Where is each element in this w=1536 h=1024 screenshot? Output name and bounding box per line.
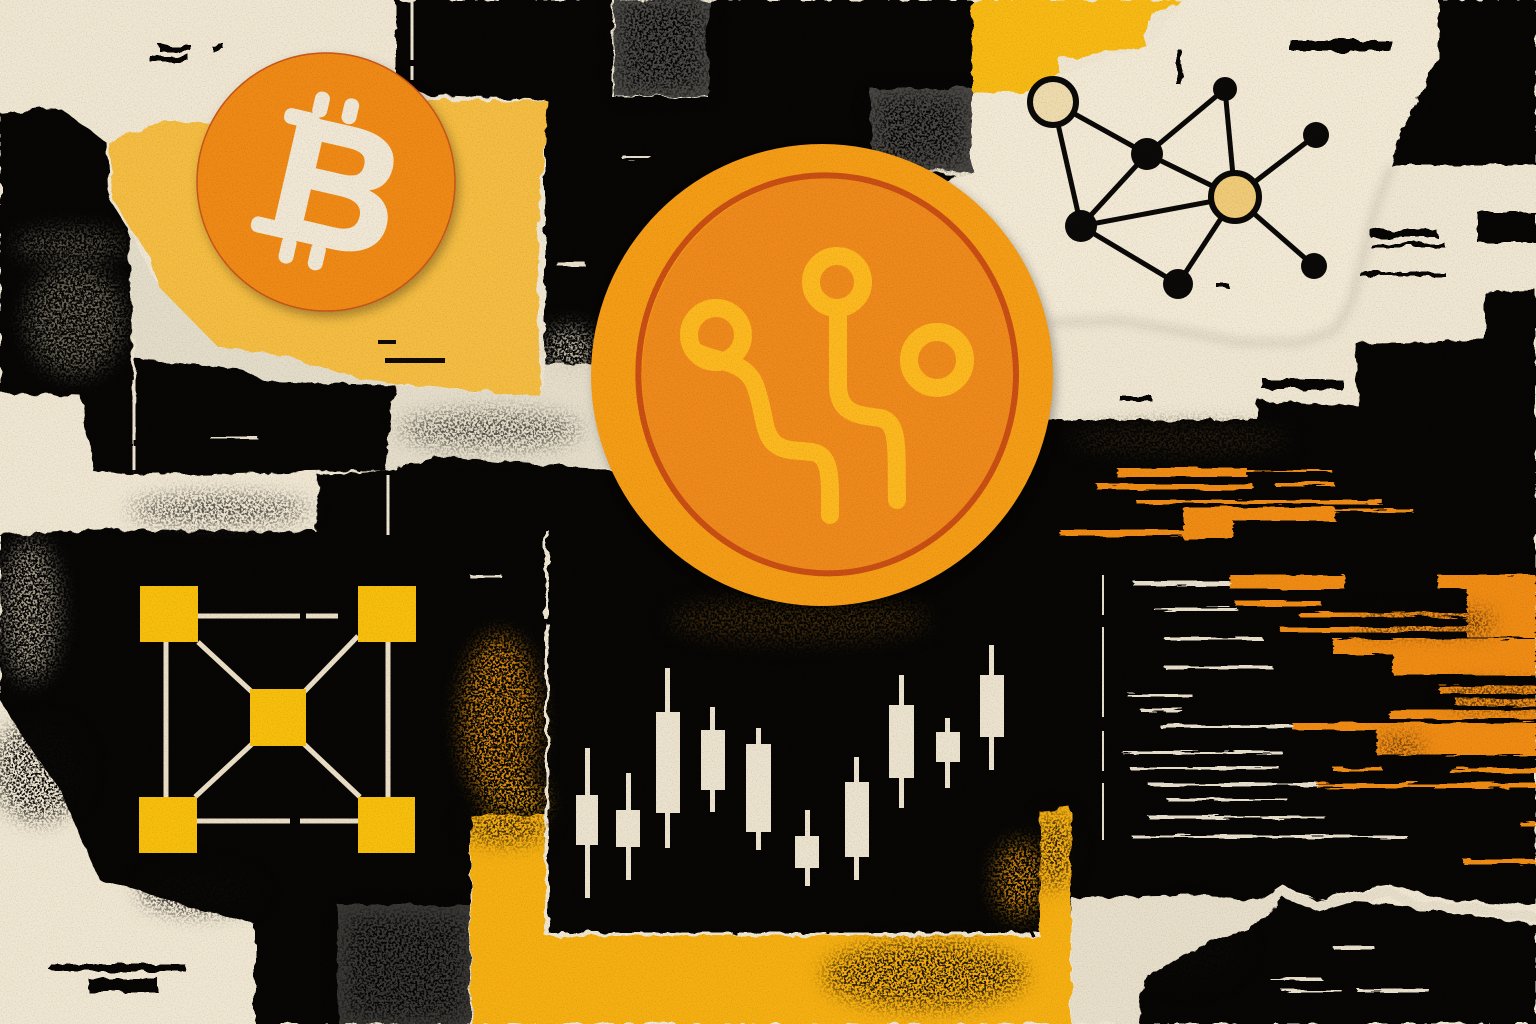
- bottom yellow panel: [470, 808, 1071, 1024]
- candle 3: [656, 668, 680, 848]
- yellow torn paper behind bitcoin: [110, 100, 548, 396]
- connector lines: [166, 616, 388, 821]
- cream patch under yellow paper: [128, 228, 395, 384]
- icon: central coin with circuit traces: [591, 144, 1053, 606]
- network edges: [1053, 89, 1316, 284]
- cream scratch lines: [210, 155, 1429, 992]
- window frame line: [547, 530, 1040, 934]
- candle 1: [576, 748, 598, 898]
- dark marks on yellow paper: [378, 340, 445, 363]
- vertical dash line right: [1102, 575, 1104, 840]
- candle 9: [936, 718, 960, 788]
- icon: blockchain node square: [139, 586, 416, 853]
- coin inner face: [642, 178, 1014, 572]
- torn edge cream strip beside coin: [385, 364, 612, 470]
- grunge on grey squares: [345, 0, 965, 1020]
- grey halftone squares: [338, 0, 972, 1024]
- coin outer rim: [591, 144, 1053, 606]
- speckle grunge patches: [0, 230, 1290, 1007]
- corner and centre blocks: [139, 586, 416, 853]
- torn cream edge lower right: [1072, 887, 1536, 1024]
- hub nodes: [1030, 79, 1076, 125]
- orange streaks: [1060, 468, 1536, 864]
- icon: network graph: [1030, 77, 1329, 299]
- candle 10: [980, 645, 1004, 770]
- candle 6: [795, 810, 819, 886]
- small nodes: [1065, 77, 1329, 299]
- icon: bitcoin coin: [197, 53, 455, 311]
- torn cream paper with network: [950, 0, 1438, 342]
- black grit on orange: [1360, 615, 1536, 754]
- bitcoin symbol: B: [253, 77, 421, 297]
- candle 2: [616, 773, 640, 880]
- candle 5: [746, 728, 771, 850]
- coin disc: [197, 53, 455, 311]
- candle 7: [845, 757, 869, 880]
- grit on cream strips: [130, 328, 594, 524]
- circuit traces: [689, 256, 965, 515]
- torn paper shadow: [1050, 165, 1392, 342]
- candlestick chart: [576, 645, 1004, 898]
- vertical cream hairlines: [134, 0, 412, 540]
- yellow paper top: [972, 0, 1181, 92]
- candle 8: [889, 675, 914, 808]
- red ring: [638, 175, 1016, 573]
- candle 4: [701, 707, 725, 812]
